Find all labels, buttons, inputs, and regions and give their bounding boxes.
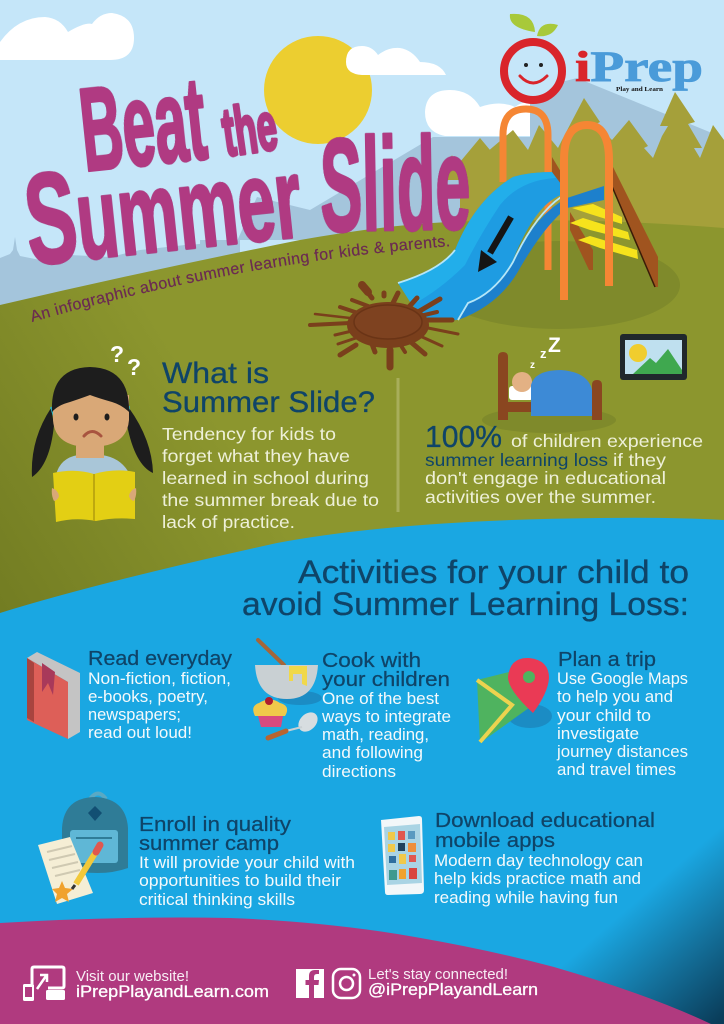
icon: map with pin: [477, 658, 552, 743]
icon: books: [27, 652, 80, 739]
what is summer slide heading: [162, 357, 375, 419]
activity: download educational mobile apps: Download educational: [435, 809, 655, 832]
slide arrow: [478, 217, 511, 272]
activity: cook with your children: directions: [322, 762, 396, 781]
social media handle: [368, 966, 538, 999]
activity: plan a trip: [556, 648, 688, 779]
activity: download educational mobile apps: Modern day technology can: [434, 851, 643, 870]
zzz: [530, 334, 561, 371]
activity: enroll in quality summer camp: It will provide your child with: [139, 853, 355, 872]
icon: devices: [23, 967, 65, 1001]
rear arch: [503, 109, 548, 270]
statistic text: activities over the summer.: [425, 487, 656, 507]
what is summer slide text: [162, 424, 379, 532]
activity: plan a trip: journey distances: [556, 742, 688, 761]
activity: download educational mobile apps: mobile apps: [435, 829, 555, 852]
activity: cook with your children: Cook with: [322, 649, 421, 672]
statistic text: [425, 419, 703, 507]
activity: read everyday: [88, 647, 233, 742]
question marks: ?: [127, 354, 141, 380]
activity: plan a trip: your child to: [557, 706, 651, 725]
activity: cook with your children: and following: [322, 743, 423, 762]
statistic text: don't engage in educational: [425, 468, 666, 488]
hair: [52, 367, 129, 412]
what is summer slide text: learned in school during: [162, 468, 369, 488]
zzz: z: [540, 346, 547, 361]
activity: enroll in quality summer camp: summer camp: [139, 832, 279, 855]
yellow book: [53, 470, 135, 522]
hair ties: [51, 406, 129, 416]
activities heading: Activities for your child to: [298, 554, 689, 590]
activity: plan a trip: Plan a trip: [558, 648, 656, 671]
pine trees: [442, 92, 724, 240]
rear brace: [552, 157, 561, 184]
title: the: [218, 88, 281, 170]
sleeping child icon: [482, 334, 616, 433]
activity: cook with your children: One of the best: [322, 689, 439, 708]
picture frame icon: [620, 334, 687, 380]
icon: backpack with paper and pencil: [38, 794, 128, 904]
slide dark side: [458, 186, 604, 320]
website link: Visit our website!: [76, 968, 189, 985]
statistic text: if they: [613, 450, 666, 470]
sun: [264, 36, 372, 144]
slide edge highlight: [398, 197, 561, 320]
activity: plan a trip: investigate: [557, 724, 639, 743]
front arch: [564, 125, 609, 300]
city skyline: [0, 225, 240, 310]
mud splat: [310, 285, 458, 367]
hill: [0, 220, 724, 620]
what is summer slide text: the summer break due to: [162, 490, 379, 510]
what is summer slide heading: What is: [162, 357, 269, 390]
activity: cook with your children: your children: [322, 668, 450, 691]
pillow and head: [509, 386, 533, 400]
logo tagline: Play and Learn: [616, 86, 663, 93]
logo ring: [504, 42, 562, 100]
hands: [52, 488, 136, 501]
social media handle: @iPrepPlayandLearn: [368, 980, 538, 999]
subtitle: An infographic about summer learning for kids & parents.: [32, 236, 450, 322]
activity: enroll in quality summer camp: [139, 813, 355, 909]
what is summer slide text: forget what they have: [162, 446, 350, 466]
title: [18, 53, 471, 292]
logo leaves: [510, 14, 558, 36]
activity: cook with your children: math, reading,: [322, 725, 429, 744]
logo wordmark: iPrep: [575, 44, 703, 91]
activity: plan a trip: Use Google Maps: [557, 669, 688, 688]
slide top surface: [398, 172, 561, 320]
eyes and mouth: [74, 414, 110, 436]
icon: smartphone with apps: [381, 816, 424, 895]
girl reading icon: [32, 341, 153, 522]
title: Summer: [18, 120, 307, 292]
activities heading: [242, 554, 689, 622]
sky background: [0, 0, 724, 340]
statistic text: summer learning loss: [425, 450, 608, 470]
what is summer slide text: lack of practice.: [162, 512, 295, 532]
playground slide: [398, 109, 658, 320]
activity: read everyday: Non-fiction, fiction,: [88, 669, 231, 688]
activity: read everyday: newspapers;: [88, 705, 181, 724]
activity: cook with your children: [321, 649, 451, 781]
icon: mixing bowl, cupcake and spoon: [253, 640, 322, 738]
activity: plan a trip: and travel times: [557, 760, 676, 779]
activity: enroll in quality summer camp: Enroll in quality: [139, 813, 292, 836]
neck and face: [53, 395, 129, 458]
icon: instagram: [333, 969, 360, 998]
activity: download educational mobile apps: help kids practice math and: [434, 869, 641, 888]
100 percent: 100%: [425, 419, 502, 454]
clouds: [0, 13, 575, 136]
slide shadow: [436, 241, 680, 329]
icon: facebook: [296, 969, 324, 998]
mountains: [0, 78, 724, 310]
zzz: z: [530, 360, 535, 371]
activities heading: avoid Summer Learning Loss:: [242, 586, 689, 622]
activity: download educational mobile apps: [434, 809, 655, 907]
zzz: Z: [548, 334, 561, 357]
slide light strip: [398, 172, 556, 305]
right rail: [608, 165, 658, 287]
pigtails: [32, 408, 153, 477]
activity: read everyday: Read everyday: [88, 647, 233, 670]
statistic text: of children experience: [511, 431, 703, 451]
shirt: [56, 455, 130, 475]
website link: iPrepPlayandLearn.com: [76, 982, 269, 1001]
what is summer slide text: Tendency for kids to: [162, 424, 336, 444]
activity: enroll in quality summer camp: critical thinking skills: [139, 890, 295, 909]
blanket: [531, 370, 592, 416]
stair treads: [570, 204, 638, 259]
social media handle: Let's stay connected!: [368, 966, 508, 983]
activity: enroll in quality summer camp: opportunities to build their: [139, 871, 341, 890]
title: Beat: [74, 53, 212, 197]
title: Slide: [319, 109, 471, 259]
purple footer band: [0, 918, 711, 1024]
activity: cook with your children: ways to integrate: [321, 707, 451, 726]
logo: [504, 14, 703, 100]
left rail: [570, 212, 593, 270]
activity: plan a trip: to help you and: [557, 687, 673, 706]
bed frame: [498, 352, 602, 420]
activity: read everyday: read out loud!: [88, 723, 192, 742]
activity: read everyday: e-books, poetry,: [88, 687, 208, 706]
logo face: [520, 63, 547, 83]
question marks: [110, 341, 141, 380]
website link: [76, 968, 269, 1001]
question marks: ?: [110, 341, 124, 367]
blue activities section: [0, 518, 724, 1024]
what is summer slide heading: Summer Slide?: [162, 386, 375, 419]
activity: download educational mobile apps: reading while having fun: [434, 888, 618, 907]
